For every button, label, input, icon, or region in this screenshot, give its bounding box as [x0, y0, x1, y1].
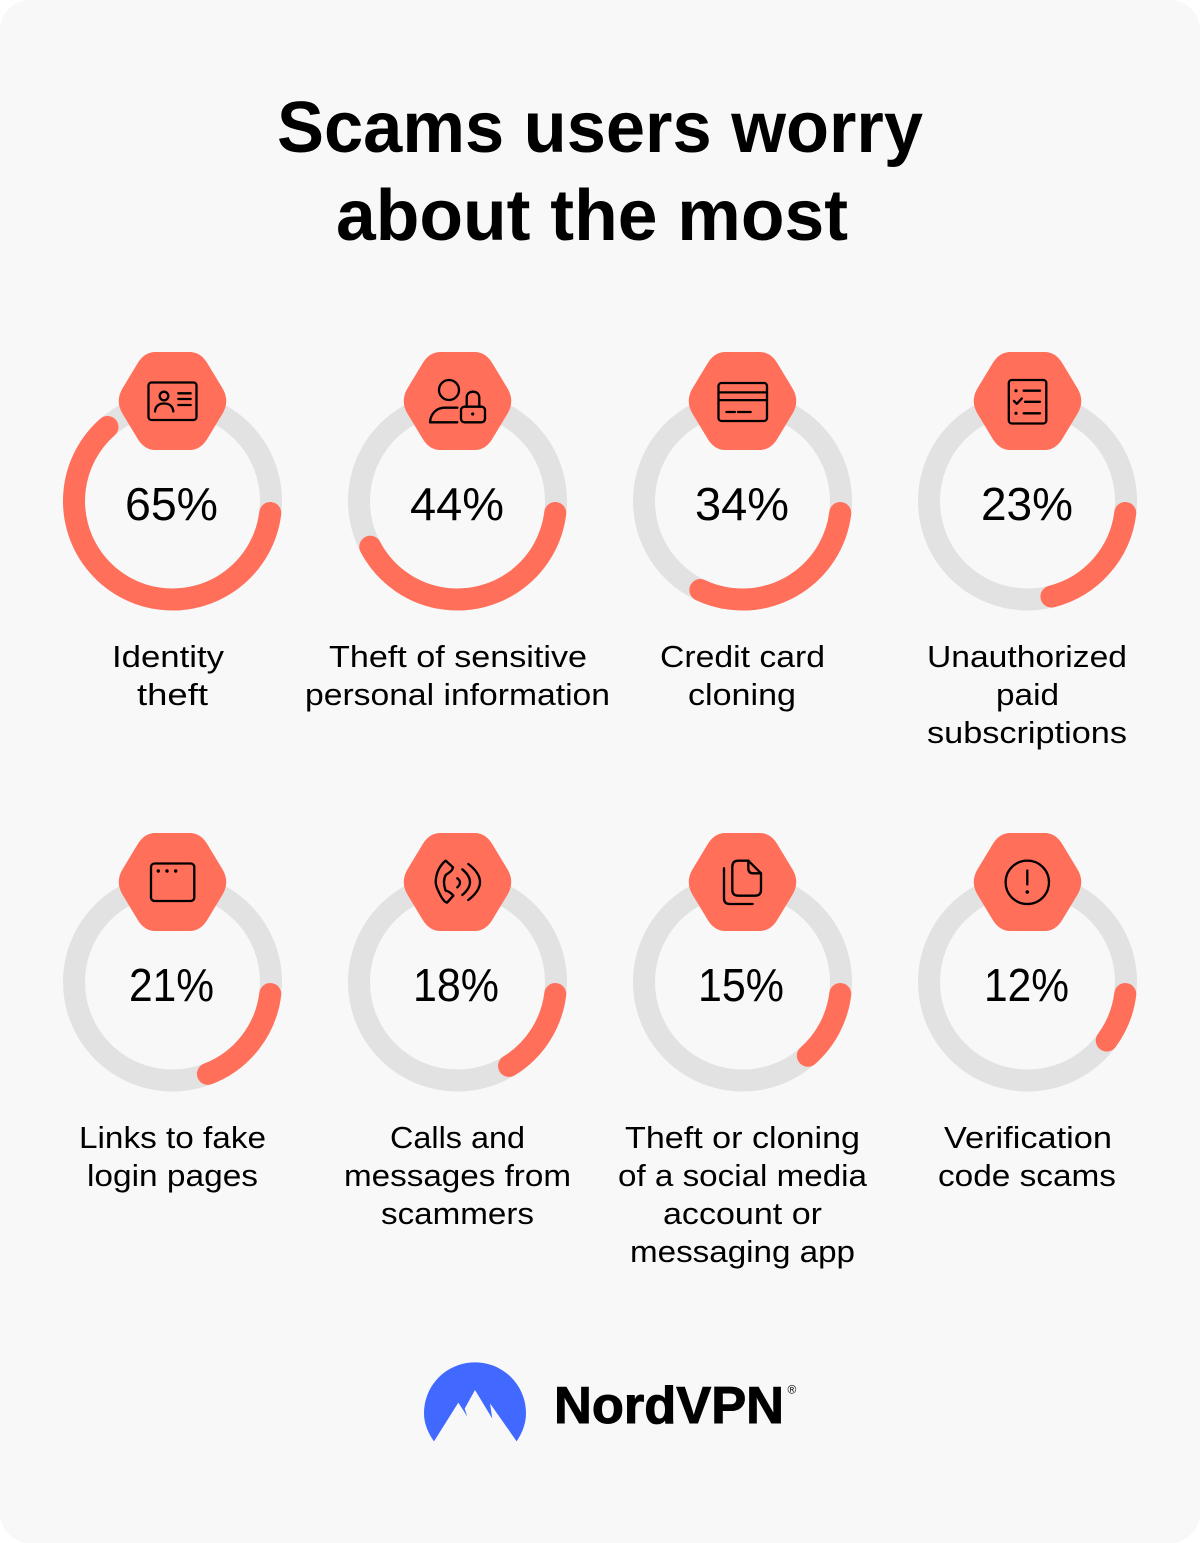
label: theft of sensitive personal information — [305, 639, 610, 712]
label: theft of sensitive personal information: personal information — [305, 677, 610, 712]
wordmark: NordVPN — [554, 1377, 784, 1435]
value: 23%: 23% — [981, 478, 1073, 530]
label: calls and messages from scammers: Calls and — [390, 1120, 525, 1155]
label: theft or cloning of a social media account or messaging app: account or — [663, 1196, 822, 1231]
label: identity theft: theft — [137, 677, 208, 712]
label: credit card cloning: Credit card — [660, 639, 825, 674]
metric: theft of sensitive personal information 44% — [305, 352, 610, 712]
metric: calls and messages from scammers 18% — [344, 833, 571, 1231]
label: theft of sensitive personal information: Theft of sensitive — [329, 639, 587, 674]
label: identity theft: Identity — [112, 639, 225, 674]
value: 21%: 21% — [129, 959, 214, 1011]
logo: NordVPN — [424, 1362, 796, 1441]
label: theft or cloning of a social media account or messaging app: of a social media — [618, 1158, 868, 1193]
label: calls and messages from scammers: messages from — [344, 1158, 571, 1193]
label: theft or cloning of a social media account or messaging app: messaging app — [630, 1234, 855, 1269]
label: calls and messages from scammers: scammers — [381, 1196, 534, 1231]
metric: theft or cloning of a social media account or messaging app 15% — [618, 833, 868, 1269]
label: credit card cloning — [660, 639, 825, 712]
metric: credit card cloning 34% — [633, 352, 852, 712]
donut chart: 15% — [633, 872, 852, 1092]
label: calls and messages from scammers — [344, 1120, 571, 1231]
label: identity theft — [112, 639, 225, 712]
donut chart: 65% — [63, 391, 282, 611]
label: verification code scams: code scams — [938, 1158, 1116, 1193]
metric: identity theft 65% — [63, 352, 282, 712]
label: links to fake login pages — [79, 1120, 266, 1193]
label: unauthorized paid subscriptions: paid — [996, 677, 1059, 712]
value: 44%: 44% — [410, 478, 504, 530]
icon: exclamation circle in hexagon — [974, 833, 1081, 931]
icon: phone with signal waves in hexagon — [404, 833, 511, 931]
value: 15%: 15% — [698, 959, 784, 1011]
title: Scams users worry — [277, 88, 923, 168]
label: links to fake login pages: login pages — [87, 1158, 258, 1193]
label: verification code scams: Verification — [944, 1120, 1112, 1155]
donut chart: 44% — [348, 391, 567, 611]
label: unauthorized paid subscriptions — [927, 639, 1127, 750]
icon: credit card in hexagon — [689, 352, 796, 450]
donut chart: 23% — [918, 391, 1137, 611]
donut chart: 34% — [633, 391, 852, 611]
icon: NordVPN mountain mark — [424, 1362, 526, 1441]
label: credit card cloning: cloning — [688, 677, 796, 712]
icon: person with padlock in hexagon — [404, 352, 511, 450]
title: about the most — [336, 176, 848, 256]
value: 18%: 18% — [413, 959, 499, 1011]
metric: verification code scams 12% — [918, 833, 1137, 1193]
value: 12%: 12% — [984, 959, 1069, 1011]
value: 65%: 65% — [125, 478, 218, 530]
label: unauthorized paid subscriptions: subscriptions — [927, 715, 1127, 750]
metric: links to fake login pages 21% — [63, 833, 282, 1193]
label: verification code scams — [938, 1120, 1116, 1193]
donut chart: 21% — [63, 872, 282, 1092]
donut chart: 18% — [348, 872, 567, 1092]
icon: ID card in hexagon — [119, 352, 226, 450]
icon: checklist in hexagon — [974, 352, 1081, 450]
icon: browser window in hexagon — [119, 833, 226, 931]
label: theft or cloning of a social media account or messaging app — [618, 1120, 868, 1269]
label: theft or cloning of a social media account or messaging app: Theft or cloning — [625, 1120, 860, 1155]
label: links to fake login pages: Links to fake — [79, 1120, 266, 1155]
title — [277, 88, 923, 256]
label: unauthorized paid subscriptions: Unauthorized — [927, 639, 1127, 674]
icon: copied documents in hexagon — [689, 833, 796, 931]
value: 34%: 34% — [695, 478, 789, 530]
registered mark: ® — [788, 1382, 796, 1396]
donut chart: 12% — [918, 872, 1137, 1092]
metric: unauthorized paid subscriptions 23% — [918, 352, 1137, 750]
